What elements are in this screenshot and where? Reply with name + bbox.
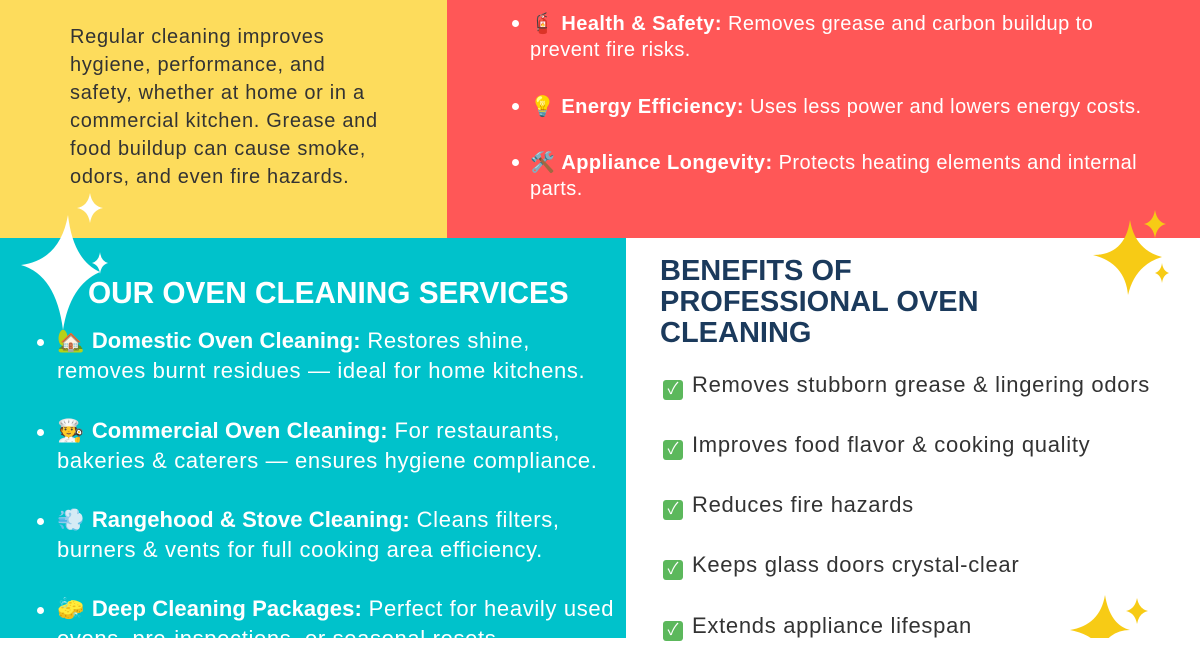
list: benefits: Extends appliance lifespan — [692, 613, 972, 638]
list: services — [37, 328, 614, 651]
list: benefits: ✓ — [668, 381, 678, 398]
heading: benefits: PROFESSIONAL OVEN — [660, 286, 979, 318]
list: benefits: ✓ — [668, 441, 678, 458]
list: reasons — [512, 12, 1141, 200]
text: ovens, pre-inspections, or seasonal resets. — [57, 626, 503, 651]
heading: benefits: BENEFITS OF — [660, 255, 852, 287]
list: services: 🧑‍🍳 Commercial Oven Cleaning: For restaurants, — [57, 418, 560, 443]
panel: services — [0, 238, 626, 638]
panel: benefits — [626, 238, 1200, 638]
text block: intro paragraph — [70, 26, 378, 188]
list: services: 💨 Rangehood & Stove Cleaning: Cleans filters, — [57, 507, 560, 532]
list: benefits: Reduces fire hazards — [692, 492, 914, 517]
heading: services: OUR OVEN CLEANING SERVICES — [88, 275, 569, 310]
text block: intro paragraph: hygiene, performance, and — [70, 54, 325, 76]
icon: white sparkle — [21, 193, 108, 330]
text block: intro paragraph: safety, whether at home or in a — [70, 82, 365, 104]
list: reasons: 🧯 Health & Safety: Removes grease and carbon buildup to — [530, 13, 1093, 35]
list: benefits: Keeps glass doors crystal-clear — [692, 552, 1019, 577]
icon: yellow sparkle bottom — [1070, 595, 1148, 638]
list: benefits: Removes stubborn grease & lingering odors — [692, 372, 1150, 397]
list: reasons: 🛠️ Appliance Longevity: Protects heating elements and internal — [530, 152, 1137, 174]
list: services: burners & vents for full cooking area efficiency. — [57, 537, 543, 562]
text block: intro paragraph: food buildup can cause smoke, — [70, 138, 366, 160]
list: services: 🧽 Deep Cleaning Packages: Perfect for heavily used — [57, 596, 614, 621]
heading: benefits — [660, 255, 979, 349]
list: reasons: prevent fire risks. — [530, 39, 691, 61]
panel: intro — [0, 0, 447, 238]
list: benefits: ✓ — [668, 561, 678, 578]
list: services: bakeries & caterers — ensures hygiene compliance. — [57, 448, 598, 473]
panel: why it matters — [447, 0, 1200, 238]
text block: intro paragraph: odors, and even fire hazards. — [70, 166, 349, 188]
text block: intro paragraph: commercial kitchen. Grease and — [70, 110, 378, 132]
list: benefits: Improves food flavor & cooking quality — [692, 432, 1090, 457]
list: reasons: parts. — [530, 178, 583, 200]
text block: intro paragraph: Regular cleaning improves — [70, 26, 324, 48]
list: services: 🏡 Domestic Oven Cleaning: Restores shine, — [57, 328, 530, 353]
list: benefits: ✓ — [668, 501, 678, 518]
heading: benefits: CLEANING — [660, 317, 811, 349]
list: reasons: 💡 Energy Efficiency: Uses less power and lowers energy costs. — [530, 96, 1141, 118]
list: benefits — [663, 372, 1150, 641]
list: benefits: ✓ — [668, 622, 678, 639]
icon: yellow sparkle top — [1093, 210, 1169, 295]
list: services: removes burnt residues — ideal for home kitchens. — [57, 358, 585, 383]
